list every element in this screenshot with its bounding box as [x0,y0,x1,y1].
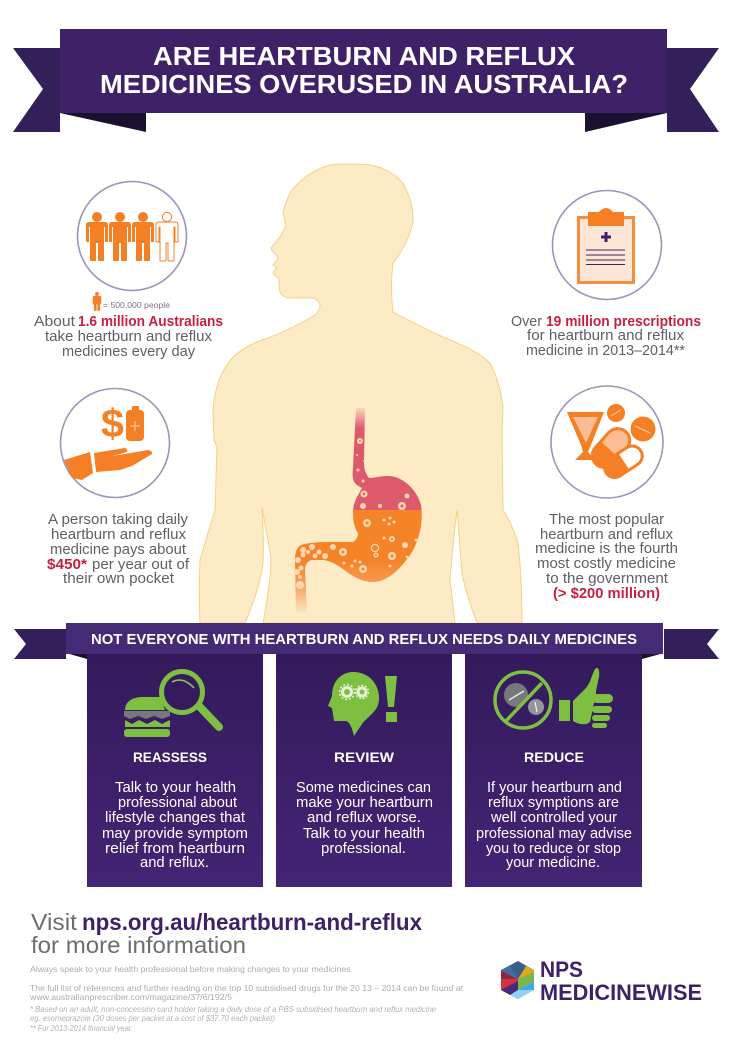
text block: A person taking daily [48,512,189,528]
footnotes and references: The full list of references and further reading on the top 10 subsidised drugs for the 20 13 – 2014 can be found at [30,983,464,993]
icon: burger and magnifying glass [124,672,219,737]
title: MEDICINES OVERUSED IN AUSTRALIA? [100,69,628,99]
text block [102,780,248,871]
text block: (> $200 million) [553,586,660,602]
text block [476,780,632,871]
text block: Over [511,314,542,330]
panel: review card [276,654,452,887]
text block: and reflux. [140,855,209,871]
text block: to the government [546,571,668,587]
text block: The most popular [549,512,664,528]
footnotes and references: www.australianprescriber.com/magazine/37/6/192/5 [29,992,232,1002]
text block: medicines every day [62,344,196,360]
icon: head with gears and exclamation mark [328,672,397,736]
icon: medicines [551,386,663,498]
text block: medicine in 2013–2014** [526,343,685,359]
footnotes and references: Always speak to your health professional before making changes to your medicines. [30,964,353,974]
text block: per year out of [92,557,190,573]
text block: professional about [118,795,237,811]
heading: REDUCE [524,749,584,765]
logo: NPS MedicineWise [501,957,702,1005]
middle ribbon banner [14,623,719,659]
text block: may provide symptom [102,826,248,842]
panel: fourth most costly medicine [535,386,678,602]
text block: for heartburn and reflux [527,328,685,344]
text block: your medicine. [506,855,600,871]
footer call to action: nps.org.au/heartburn-and-reflux [82,909,422,935]
text block: and reflux worse. [307,810,421,826]
icon: crossed-out pills and thumbs up [495,668,613,728]
text block: lifestyle changes that [105,810,245,826]
text block: medicine is the fourth [535,541,678,557]
text block: well controlled your [490,810,617,826]
stomach illustration [294,408,422,613]
text block: make your heartburn [296,795,433,811]
text block: If your heartburn and [487,780,622,796]
footnotes and references: * Based on an adult, non-concession card holder taking a daily dose of a PBS subsidised heartburn and reflux medicine [30,1005,436,1014]
text block: 1.6 million Australians [78,314,223,330]
icon: people in circle [78,182,186,290]
panel: reduce card [465,654,642,887]
text block: their own pocket [63,571,174,587]
panel: 1.6 million Australians [34,182,223,360]
panel: $450 out of pocket [47,388,190,587]
legend: one person equals 500,000 people [93,292,171,311]
text block: Some medicines can [296,780,431,796]
human body silhouette [199,164,522,623]
text block: About [34,314,75,330]
text block: professional. [321,841,406,857]
logo: NPS MedicineWise: NPS [540,957,583,982]
text block: professional may advise [476,826,632,842]
legend: one person equals 500,000 people: = 500,000 people [103,301,171,310]
text block: most costly medicine [537,556,676,572]
logo: NPS MedicineWise: MEDICINEWISE [540,980,702,1005]
icon: clipboard [552,190,662,300]
heading: REVIEW [334,749,395,765]
text block: reflux symptions are [488,795,619,811]
stomach acid bubbles [294,438,418,589]
text block [511,314,701,359]
text block [296,780,433,857]
footnotes and references [29,964,464,1033]
banner heading: NOT EVERYONE WITH HEARTBURN AND REFLUX NEEDS DAILY MEDICINES [91,632,637,648]
text block: Talk to your health [115,780,236,796]
title [100,41,628,99]
text block [535,512,678,602]
top ribbon banner with title [13,29,719,132]
text block: heartburn and reflux [51,527,187,543]
icon: hand with money and medicine [60,388,170,498]
footer call to action: Visit [31,909,78,935]
text block: relief from heartburn [105,841,245,857]
heading: REASSESS [133,749,207,765]
text block: $450* [47,557,87,573]
text block: Talk to your health [303,826,425,842]
text block: 19 million prescriptions [546,314,701,330]
title: ARE HEARTBURN AND REFLUX [153,41,576,71]
text block [47,512,190,587]
text block: heartburn and reflux [540,527,674,543]
text block: you to reduce or stop [486,841,621,857]
panel: reassess card [87,654,263,887]
text block: medicine pays about [50,542,186,558]
footnotes and references: ** For 2013-2014 financial year. [30,1024,133,1033]
icon: hand with money and medicine: $ [101,402,124,446]
footnotes and references: eg. esomeprazole (30 doses per packet at a cost of $37.70 each packet). [30,1014,277,1023]
footer call to action [31,909,422,958]
panel: 19 million prescriptions [511,190,701,359]
footer call to action: for more information [31,932,246,958]
text block: take heartburn and reflux [45,329,213,345]
text block [34,314,223,360]
